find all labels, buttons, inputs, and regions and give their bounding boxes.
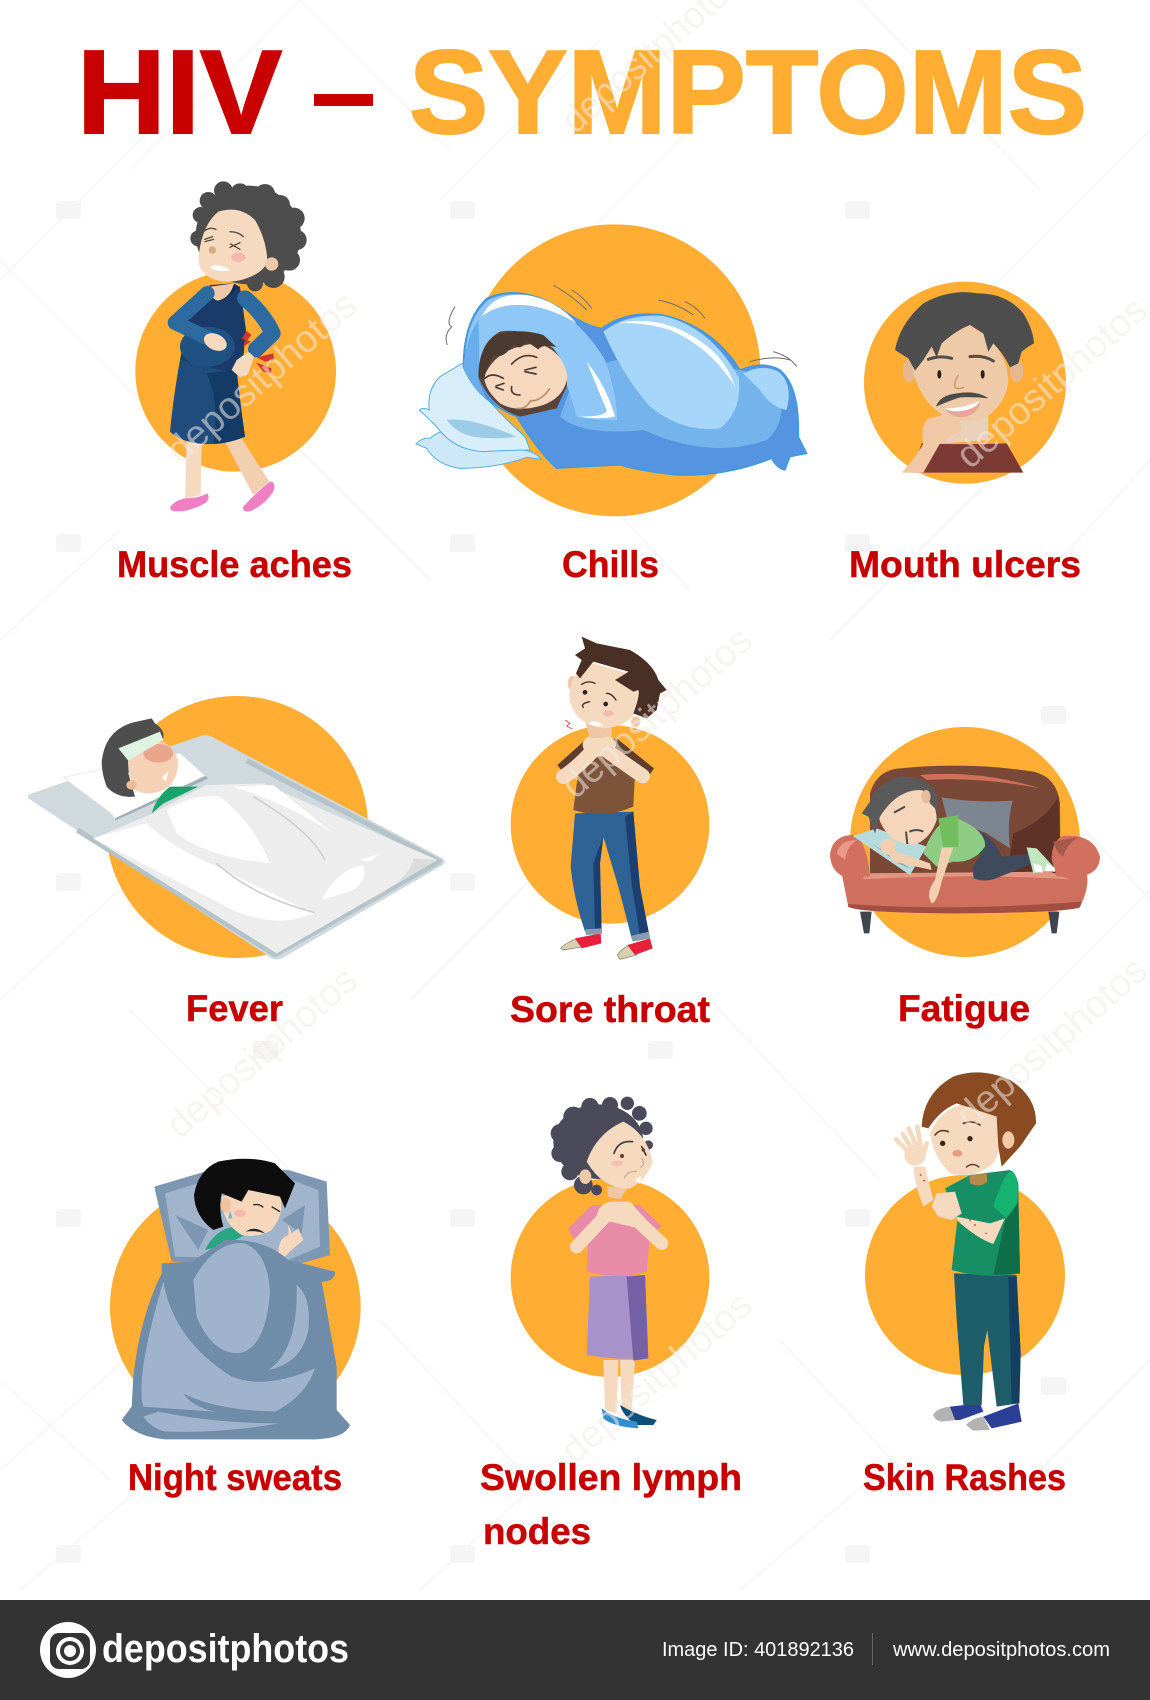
icon: person shivering under a blue blanket bbox=[416, 224, 807, 516]
hair bbox=[551, 1097, 653, 1195]
icon: man pointing at sore mouth bbox=[864, 282, 1066, 484]
hair bbox=[190, 181, 307, 291]
text: depositphotos bbox=[158, 959, 366, 1147]
panel: Chills bbox=[416, 224, 807, 585]
panel: Night sweats bbox=[110, 1159, 361, 1498]
logo wordmark: depositphotos bbox=[102, 1627, 349, 1671]
label: Muscle aches: Muscle aches bbox=[117, 544, 352, 585]
label: Sore throat: Sore throat bbox=[510, 989, 710, 1030]
website url: www.depositphotos.com bbox=[892, 1639, 1110, 1661]
icon: child sweating under a grey blanket bbox=[110, 1159, 361, 1439]
panel: Mouth ulcers bbox=[849, 282, 1081, 585]
footer bar bbox=[0, 1600, 1150, 1700]
panel: Sore throat bbox=[510, 637, 710, 1030]
title: HIV bbox=[77, 26, 282, 159]
panel: Skin Rashes bbox=[863, 1072, 1066, 1498]
label: Swollen lymph nodes bbox=[480, 1457, 742, 1552]
icon: woman touching her swollen neck bbox=[511, 1097, 709, 1428]
label: Mouth ulcers: Mouth ulcers bbox=[849, 544, 1081, 585]
icon: exhausted man lying on a sofa bbox=[830, 727, 1100, 957]
text: depositphotos bbox=[158, 284, 366, 472]
panel: Fatigue bbox=[830, 727, 1100, 1029]
title: SYMPTOMS bbox=[409, 26, 1087, 159]
title bbox=[77, 26, 1087, 159]
text: depositphotos bbox=[553, 1284, 761, 1472]
label: Skin Rashes: Skin Rashes bbox=[863, 1457, 1066, 1498]
label: Fever: Fever bbox=[186, 988, 283, 1029]
text: depositphotos bbox=[948, 289, 1150, 477]
panel: Muscle aches bbox=[117, 181, 352, 585]
icon: man inspecting rash on his arm bbox=[865, 1072, 1065, 1431]
label: Swollen lymph nodes: nodes bbox=[483, 1511, 591, 1552]
panel: Swollen lymph nodes bbox=[480, 1097, 742, 1552]
label: Fatigue: Fatigue bbox=[898, 988, 1030, 1029]
image id: Image ID: 401892136 bbox=[662, 1639, 854, 1661]
label: Chills: Chills bbox=[562, 544, 659, 585]
logo: camera mark bbox=[40, 1622, 96, 1678]
text: depositphotos bbox=[553, 619, 761, 807]
icon: woman holding her aching side bbox=[135, 181, 336, 512]
icon: feverish person in bed bbox=[28, 696, 445, 959]
label: Swollen lymph nodes: Swollen lymph bbox=[480, 1457, 742, 1498]
text: depositphotos bbox=[948, 949, 1150, 1137]
face bbox=[478, 331, 567, 417]
label: Night sweats: Night sweats bbox=[128, 1457, 342, 1498]
icon: man holding his throat bbox=[511, 637, 709, 959]
panel: Fever bbox=[28, 696, 445, 1029]
blanket bbox=[463, 293, 807, 475]
